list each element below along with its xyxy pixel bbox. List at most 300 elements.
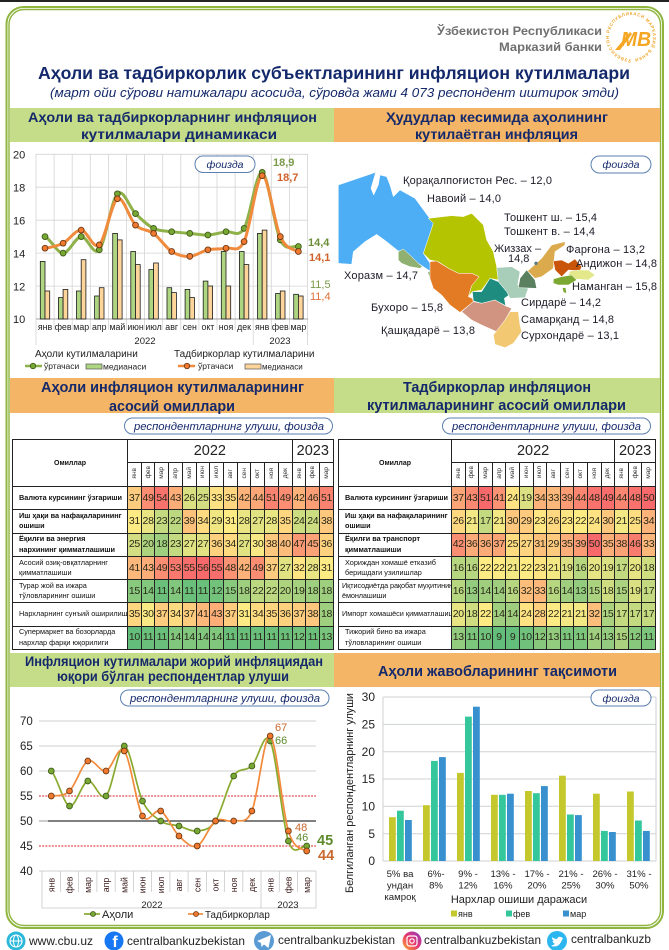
table: business inflation factors heatmap: 23	[562, 515, 573, 527]
x axis labels: мар	[302, 877, 312, 893]
table: population inflation factors heatmap: 11	[157, 631, 167, 643]
y axis labels: 40	[20, 866, 33, 878]
table: population inflation factors heatmap: 27	[252, 515, 263, 527]
table: population inflation factors heatmap: Супермаркет ва бозорларда	[19, 627, 115, 636]
table: business inflation factors heatmap: Омиллар	[379, 460, 411, 466]
heading: dynamics: Аҳоли ва тадбиркорларнинг инфляцион	[28, 109, 317, 125]
table: business inflation factors heatmap: 19	[521, 492, 532, 504]
legend: dynamics	[25, 348, 315, 372]
x axis categories: 5% ва	[387, 869, 414, 880]
table: business inflation factors heatmap: 20	[589, 562, 600, 574]
table: business inflation factors heatmap: 16	[466, 562, 477, 574]
table: population inflation factors heatmap: 18	[239, 585, 250, 597]
table: business inflation factors heatmap: 17	[643, 585, 654, 597]
map labels: Самарқанд – 14,8	[521, 314, 614, 326]
y axis labels: 20	[362, 745, 375, 759]
table: population inflation factors heatmap: ошиши	[19, 521, 45, 530]
table: population inflation factors heatmap: 34	[170, 608, 181, 620]
x axis labels: 2023	[269, 336, 291, 347]
table: business inflation factors heatmap: 17	[630, 608, 641, 620]
map labels: Навоий – 14,0	[427, 193, 501, 205]
table: business inflation factors heatmap: 25	[630, 515, 641, 527]
table: business inflation factors heatmap: 24	[521, 608, 532, 620]
table: population inflation factors heatmap: 31	[239, 608, 250, 620]
table: business inflation factors heatmap: фев	[632, 466, 639, 478]
table: business inflation factors heatmap: авг	[550, 469, 557, 478]
table: population inflation factors heatmap: 30	[252, 538, 263, 550]
table: business inflation factors heatmap: 18	[643, 562, 654, 574]
y axis labels: 60	[20, 766, 33, 778]
pill: share unit	[120, 690, 329, 706]
table: population inflation factors heatmap: 14	[184, 631, 195, 643]
y axis labels: 45	[20, 841, 33, 853]
y axis labels: 0	[368, 854, 375, 868]
x axis labels: янв	[255, 322, 270, 332]
table: population inflation factors heatmap: 31	[321, 562, 332, 574]
data labels: 18,7	[277, 172, 298, 184]
icon: central bank logo: ЎЗБЕКИСТОН РЕСПУБЛИКАСИ МАРКАЗИЙ БАНКИ	[606, 12, 656, 63]
table: business inflation factors heatmap: 16	[453, 562, 464, 574]
x axis labels: 2023	[277, 900, 299, 911]
y axis labels: 18	[13, 182, 25, 194]
heading: dynamics	[10, 108, 334, 142]
table: population inflation factors heatmap: Ёқилғи ва энергия	[19, 534, 85, 543]
table: population inflation factors heatmap: 35	[266, 608, 277, 620]
x axis categories: 8%	[429, 880, 443, 892]
table: business inflation factors heatmap: 13	[466, 585, 477, 597]
table: population inflation factors heatmap: 56	[197, 562, 208, 574]
data labels: 11,5	[310, 279, 331, 291]
y axis labels: 20	[13, 150, 25, 162]
table: population inflation factors heatmap: сен	[241, 468, 248, 478]
table: business inflation factors heatmap: 36	[466, 538, 477, 550]
x axis categories: 50%	[629, 880, 649, 892]
table: business inflation factors heatmap: 20	[630, 562, 641, 574]
x axis labels: ноя	[229, 878, 239, 892]
x axis labels	[46, 876, 312, 911]
x axis labels: май	[109, 322, 125, 332]
table: population inflation factors heatmap: мар	[323, 467, 330, 478]
x axis categories: 20%	[527, 880, 547, 892]
table: business inflation factors heatmap: дек	[604, 468, 611, 478]
legend: distribution: фев	[513, 909, 530, 919]
map labels: Қашқадарё – 13,8	[381, 325, 475, 337]
table: population inflation factors heatmap: 46	[307, 492, 318, 504]
header: central bank name: Ўзбекистон Республикаси	[436, 23, 602, 38]
table: population inflation factors heatmap: нархининг қимматлашиши	[19, 545, 115, 554]
table: population inflation factors heatmap: апр	[172, 468, 179, 478]
table: population inflation factors heatmap: 18	[156, 538, 167, 550]
panel: share above current inflation	[10, 653, 334, 921]
x axis labels: янв	[46, 878, 56, 892]
table: business inflation factors heatmap: 19	[602, 562, 613, 574]
table: business inflation factors heatmap: 26	[548, 515, 559, 527]
table: population inflation factors heatmap: 28	[266, 515, 277, 527]
table: population inflation factors heatmap: 37	[294, 608, 305, 620]
table: population inflation factors heatmap: 48	[225, 562, 236, 574]
table: population inflation factors heatmap: 49	[252, 562, 263, 574]
table: business inflation factors heatmap: 19	[562, 562, 573, 574]
table: population inflation factors heatmap: 37	[156, 608, 167, 620]
table: population inflation factors heatmap: Асосий озиқ-овқатларнинг	[19, 558, 108, 567]
table: business inflation factors heatmap: сен	[564, 468, 571, 478]
legend: share	[84, 909, 270, 921]
table: population inflation factors heatmap: дек	[282, 468, 289, 478]
table: population inflation factors heatmap: 25	[129, 538, 140, 550]
table: business inflation factors heatmap: 2022	[517, 443, 549, 459]
table: population inflation factors heatmap: 43	[211, 608, 222, 620]
x axis labels: мар	[83, 877, 93, 893]
table: business inflation factors heatmap: Тижорий бино ва ижара	[345, 627, 426, 636]
table: population inflation factors heatmap: 44	[252, 492, 263, 504]
panel: regional map	[334, 108, 660, 348]
heading: business factors	[334, 378, 660, 414]
table: population inflation factors heatmap: 2022	[194, 443, 226, 459]
table: population inflation factors heatmap: 40	[280, 538, 291, 550]
heading: regions: кутилаётган инфляция	[415, 126, 578, 142]
table: business inflation factors heatmap: 15	[616, 631, 627, 643]
table: population inflation factors heatmap: 31	[129, 515, 140, 527]
map labels: 14,8	[508, 253, 529, 265]
bars: business median	[45, 230, 303, 319]
table: business inflation factors heatmap: янв	[455, 468, 462, 478]
table: business inflation factors heatmap: 11	[562, 631, 572, 643]
y axis labels	[362, 690, 375, 868]
table: population inflation factors heatmap: 42	[239, 492, 250, 504]
table: business inflation factors heatmap: 39	[562, 492, 573, 504]
table: business inflation factors heatmap: 10	[521, 631, 532, 643]
x axis labels: 2022	[134, 336, 156, 347]
table: business inflation factors heatmap: 32	[521, 585, 532, 597]
table: business inflation factors heatmap: 48	[589, 492, 600, 504]
table: business inflation factors heatmap: 22	[575, 515, 586, 527]
line: business share	[51, 736, 307, 851]
table: population inflation factors heatmap: 11	[253, 631, 263, 643]
x axis categories	[384, 869, 652, 903]
pill: percent unit: фоизда	[603, 693, 640, 705]
table: business inflation factors heatmap: 21	[575, 608, 586, 620]
table: business inflation factors heatmap: 14	[494, 585, 505, 597]
data labels	[275, 722, 334, 864]
y axis labels: 50	[20, 816, 33, 828]
heading: population factors: асосий омиллари	[109, 399, 235, 415]
table: population inflation factors heatmap: авг	[227, 469, 234, 478]
table: population inflation factors heatmap: 42	[294, 492, 305, 504]
heading: share above inflation: Инфляцион кутилмалари жорий инфляциядан	[25, 653, 323, 669]
x axis labels: мар	[290, 322, 306, 332]
x axis labels: дек	[237, 322, 251, 332]
table: business inflation factors heatmap: 16	[575, 562, 586, 574]
table: business inflation factors heatmap: 21	[494, 515, 505, 527]
table: business inflation factors heatmap: 30	[602, 515, 613, 527]
table: population inflation factors heatmap: 14	[211, 631, 222, 643]
x axis labels: сен	[192, 878, 202, 892]
table: population inflation factors heatmap: окт	[254, 469, 261, 478]
table: population inflation factors heatmap: 18	[321, 608, 332, 620]
line: business average	[45, 176, 298, 256]
footer: social links: centralbankuzbekistan	[424, 933, 541, 947]
pill: share unit left: респондентларнинг улуши, фоизда	[133, 421, 324, 433]
heading: dynamics: кутилмалари динамикаси	[81, 126, 277, 142]
icon: instagram	[402, 932, 422, 950]
y axis labels: 70	[20, 716, 33, 728]
map labels: Қорақалпоғистон Рес. – 12,0	[403, 175, 552, 187]
table: business inflation factors heatmap: 13	[575, 585, 586, 597]
panel: dynamics chart	[10, 108, 334, 372]
table: population inflation factors heatmap: 14	[197, 631, 208, 643]
table: population inflation factors heatmap: 14	[170, 585, 181, 597]
pill: share unit: респондентларнинг улуши, фоизда	[129, 693, 320, 705]
pill: percent unit: фоизда	[603, 159, 640, 171]
table: population inflation factors heatmap: 55	[184, 562, 195, 574]
table: business inflation factors heatmap: 12	[534, 631, 545, 643]
y axis labels: 14	[13, 248, 25, 260]
footer: social links: centralbankuzbekistan	[127, 934, 245, 948]
table: population inflation factors heatmap: 15	[129, 585, 140, 597]
table: business inflation factors heatmap: 26	[453, 515, 464, 527]
x axis labels: 2022	[141, 900, 163, 911]
table: population inflation factors heatmap: 37	[266, 562, 277, 574]
x axis labels	[38, 322, 306, 347]
table: business inflation factors heatmap: 19	[630, 585, 641, 597]
table: business inflation factors heatmap: 41	[494, 492, 505, 504]
table: business inflation factors heatmap: 14	[562, 585, 573, 597]
map labels: Андижон – 14,8	[576, 258, 657, 270]
table: business inflation factors heatmap: апр	[496, 468, 503, 478]
x axis categories: 16%	[493, 880, 513, 892]
table: business inflation factors heatmap: 21	[507, 562, 518, 574]
y axis labels: 30	[362, 690, 375, 704]
table: population inflation factors heatmap: 35	[129, 608, 140, 620]
table: business inflation factors heatmap: 18	[466, 608, 477, 620]
table: business inflation factors heatmap: 22	[548, 608, 559, 620]
table: population inflation factors heatmap: 2023	[297, 443, 329, 459]
heading: regions	[334, 108, 660, 142]
table: population inflation factors heatmap: мар	[158, 467, 165, 478]
table: business inflation factors heatmap: 49	[602, 492, 613, 504]
map labels: Тошкент в. – 14,4	[504, 226, 595, 238]
x axis labels: июн	[127, 322, 144, 332]
table: business inflation factors heatmap: 12	[630, 631, 641, 643]
legend: share: Тадбиркорлар	[205, 910, 270, 921]
x axis categories: 26% -	[592, 869, 618, 880]
table: business inflation factors heatmap: 10	[480, 631, 491, 643]
legend: share: Аҳоли	[102, 909, 133, 921]
table: population inflation factors heatmap: 25	[197, 492, 208, 504]
table: business inflation factors heatmap: 20	[453, 608, 464, 620]
x axis title: Нархлар ошиши даражаси	[451, 894, 587, 906]
table: business inflation factors heatmap: 22	[521, 562, 532, 574]
y axis labels: 65	[20, 741, 33, 753]
heading: population factors: Аҳоли инфляцион кутилмаларининг	[41, 380, 304, 396]
data labels: 11,4	[310, 291, 331, 303]
table: population inflation factors heatmap: 22	[266, 585, 277, 597]
data labels: 67	[275, 722, 287, 734]
table: population inflation factors heatmap: 27	[280, 562, 291, 574]
table: population inflation factors heatmap: Иш ҳақи ва нафақаларининг	[19, 511, 122, 520]
pill: share unit right	[442, 418, 650, 434]
table: business inflation factors heatmap: окт	[577, 469, 584, 478]
table: business inflation factors heatmap: мар	[645, 467, 652, 478]
bars: population median	[40, 233, 298, 319]
x axis labels: авг	[165, 322, 178, 332]
map labels: Тошкент ш. – 15,4	[504, 212, 597, 224]
table: population inflation factors heatmap: 11	[280, 631, 290, 643]
x axis categories: 21% -	[558, 869, 584, 880]
table: population inflation factors heatmap: 24	[307, 515, 318, 527]
data labels: 14,4	[308, 237, 330, 249]
table: population inflation factors heatmap: 23	[156, 515, 167, 527]
table: population inflation factors heatmap: 22	[252, 585, 263, 597]
y axis labels: 55	[20, 791, 33, 803]
table: population inflation factors heatmap: 28	[143, 515, 154, 527]
table: business inflation factors heatmap: 11	[575, 631, 586, 643]
table: business inflation factors heatmap: 14	[589, 631, 600, 643]
legend: distribution: мар	[570, 909, 586, 919]
table: population inflation factors heatmap: 45	[307, 538, 318, 550]
table: business inflation factors heatmap: 17	[480, 515, 491, 527]
x axis labels: май	[120, 877, 130, 893]
legend: dynamics: медианаси	[103, 362, 146, 372]
table: population inflation factors heatmap: 24	[294, 515, 305, 527]
table: population inflation factors heatmap: фев	[145, 466, 152, 478]
x axis categories: камроқ	[384, 892, 416, 903]
table: population inflation factors heatmap: 36	[280, 608, 291, 620]
table: population inflation factors heatmap: 42	[239, 562, 250, 574]
heading: distribution	[334, 653, 660, 687]
x axis labels: ноя	[219, 322, 233, 332]
icon: central bank logo: МВ	[621, 29, 651, 51]
legend: dynamics: ўртачаси	[198, 361, 234, 371]
x axis categories: 25%	[561, 880, 581, 892]
table: population inflation factors heatmap: 27	[239, 538, 250, 550]
table: population inflation factors heatmap: Валюта курсининг ўзгариши	[19, 493, 122, 502]
heading: population factors	[10, 378, 334, 415]
data labels: 45	[317, 833, 333, 849]
table: population inflation factors heatmap: 37	[184, 608, 195, 620]
table: business inflation factors heatmap: 30	[507, 515, 518, 527]
table: population inflation factors heatmap: 51	[321, 492, 332, 504]
table: business inflation factors heatmap: ёмонлашиши	[342, 591, 386, 600]
x axis labels: авг	[174, 879, 184, 891]
legend: distribution: янв	[458, 909, 473, 919]
table: population inflation factors heatmap: 15	[225, 585, 236, 597]
table: business inflation factors heatmap: ноя	[591, 468, 598, 478]
table: business inflation factors heatmap: 16	[453, 585, 464, 597]
table: business inflation factors heatmap: 33	[534, 585, 545, 597]
table: business inflation factors heatmap: 31	[534, 538, 545, 550]
x axis labels: янв	[38, 322, 52, 332]
table: population inflation factors heatmap: 11	[266, 631, 277, 643]
legend: dynamics: ўртачаси	[44, 361, 80, 371]
table: population inflation factors heatmap: 37	[129, 492, 140, 504]
table: business inflation factors heatmap: мар	[482, 467, 489, 478]
x axis labels: июл	[145, 322, 162, 332]
icon: website globe	[6, 932, 26, 950]
table: business inflation factors heatmap: 18	[602, 585, 613, 597]
data labels: 14,1	[309, 252, 330, 264]
table: population inflation factors heatmap: 49	[143, 492, 154, 504]
map labels: Жиззах –	[494, 243, 542, 255]
table: business inflation factors heatmap: 11	[644, 631, 654, 643]
table: business inflation factors heatmap: 22	[494, 562, 505, 574]
table: population inflation factors heatmap: 28	[307, 562, 318, 574]
table: business inflation factors heatmap: фев	[468, 466, 475, 478]
map labels: Фарғона – 13,2	[566, 244, 645, 256]
table: population inflation factors heatmap: 49	[156, 562, 167, 574]
y axis labels	[20, 716, 33, 878]
map labels: Хоразм – 14,7	[344, 270, 418, 282]
heading: distribution: Аҳоли жавобларининг тақсимоти	[378, 663, 617, 680]
table: population inflation factors heatmap: 49	[280, 492, 291, 504]
table: population inflation factors heatmap: 30	[143, 608, 154, 620]
table: business inflation factors heatmap: 9	[496, 631, 502, 643]
x axis categories: 17% -	[524, 869, 550, 880]
y axis labels: 10	[13, 314, 25, 326]
table: business inflation factors heatmap: 21	[466, 515, 477, 527]
table: business inflation factors heatmap: 14	[494, 608, 505, 620]
y axis title: Белгиланган респондентларнинг улуши	[344, 693, 356, 893]
table: population inflation factors heatmap: 26	[184, 492, 195, 504]
table: business inflation factors heatmap: 25	[507, 538, 518, 550]
table: population inflation factors heatmap: ноя	[268, 468, 275, 478]
table: population inflation factors heatmap: 11	[308, 631, 318, 643]
data labels: 44	[318, 848, 334, 864]
table: business inflation factors heatmap: 21	[616, 515, 627, 527]
table: population inflation factors heatmap: қимматлашиши	[19, 568, 72, 577]
table: population inflation factors heatmap: 22	[170, 515, 181, 527]
x axis categories: 13% -	[490, 869, 516, 880]
y axis labels: 25	[362, 718, 375, 732]
table: population inflation factors heatmap: 14	[170, 631, 181, 643]
table: business inflation factors heatmap: Иш ҳақи ва нафақаларининг	[345, 511, 448, 520]
x axis labels: фев	[272, 322, 289, 332]
table: population inflation factors heatmap: 35	[280, 515, 291, 527]
table: business inflation factors heatmap: 35	[562, 538, 573, 550]
map labels: Наманган – 15,8	[572, 281, 657, 293]
table: business inflation factors heatmap: 24	[589, 515, 600, 527]
table: business inflation factors heatmap: 28	[534, 608, 545, 620]
table: population inflation factors heatmap: 12	[294, 631, 305, 643]
x axis labels: фев	[284, 876, 294, 893]
heading: business factors: кутилмаларининг асосий омиллари	[367, 398, 626, 414]
y axis labels: 12	[13, 282, 25, 294]
x axis categories: 30%	[595, 880, 615, 892]
table: population inflation factors heatmap	[12, 439, 334, 650]
table: business inflation factors heatmap: Хориждан хомашё етказиб	[345, 558, 436, 567]
table: business inflation factors heatmap: 32	[589, 608, 600, 620]
table: business inflation factors heatmap: 50	[643, 492, 654, 504]
table: business inflation factors heatmap: 11	[467, 631, 477, 643]
table: business inflation factors heatmap: беришдаги узилишлар	[345, 568, 422, 577]
x axis labels: июн	[138, 877, 148, 893]
table: population inflation factors heatmap: 31	[225, 515, 236, 527]
x axis categories: 31% -	[626, 869, 652, 880]
table: population inflation factors heatmap: июл	[213, 466, 220, 478]
table: business inflation factors heatmap: 44	[616, 492, 627, 504]
x axis labels: сен	[183, 322, 197, 332]
line: population average	[45, 172, 298, 253]
table: population inflation factors heatmap: янв	[131, 468, 138, 478]
table: population inflation factors heatmap: 38	[321, 515, 332, 527]
table: business inflation factors heatmap: 17	[616, 608, 627, 620]
table: business inflation factors heatmap: июн	[523, 466, 530, 478]
table: population inflation factors heatmap: 41	[197, 608, 208, 620]
x axis labels: июл	[156, 877, 166, 893]
table: population inflation factors heatmap: 34	[197, 515, 208, 527]
table: business inflation factors heatmap: 39	[575, 538, 586, 550]
table: business inflation factors heatmap: Ёқилғи ва транспорт	[345, 534, 420, 543]
